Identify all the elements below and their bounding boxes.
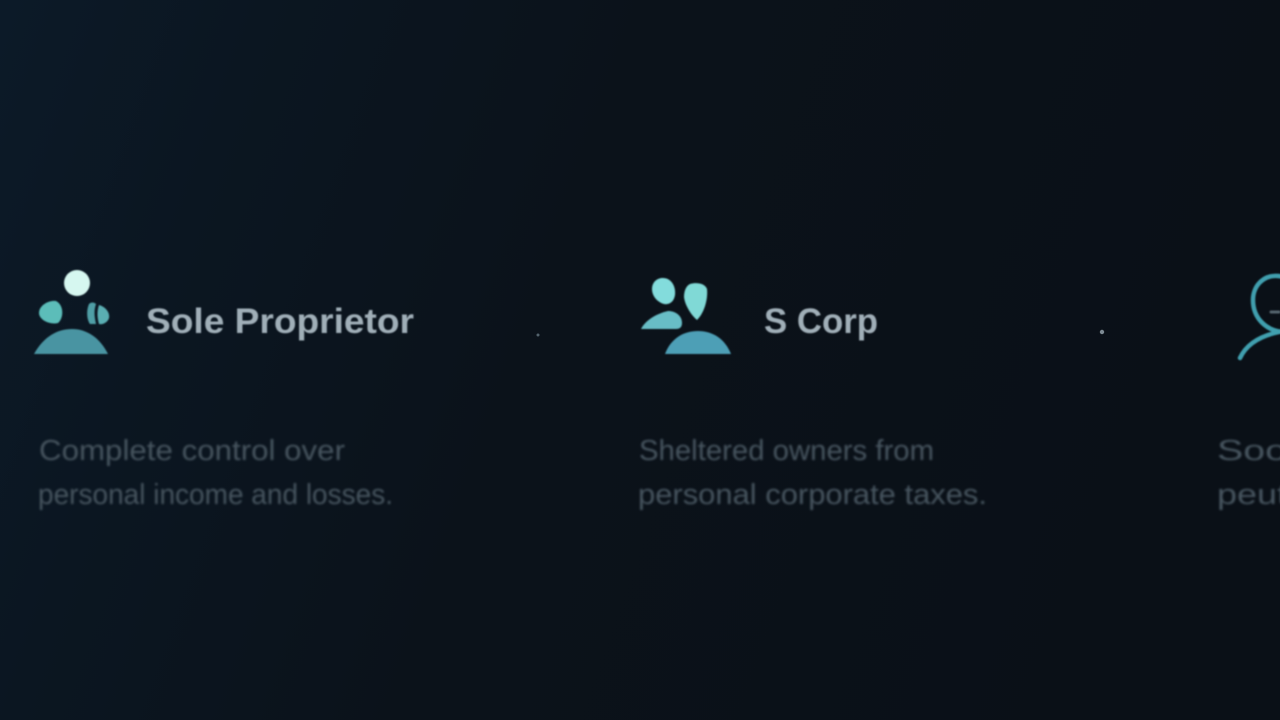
panel: sole proprietor [34, 270, 414, 511]
text block: sole proprietor description: personal income and losses. [38, 479, 393, 511]
text block: s corp description: personal corporate taxes. [638, 479, 987, 511]
text block: sole proprietor description [38, 435, 393, 511]
panel: third structure, cropped at right edge [1217, 276, 1280, 511]
heading: sole proprietor: Sole Proprietor [146, 302, 414, 341]
heading: s corp: S Corp [764, 302, 878, 341]
text block: s corp description: Sheltered owners from [639, 435, 934, 467]
text block: third structure description: peut [1217, 479, 1280, 511]
text block: third structure description [1217, 435, 1280, 511]
icon: outlined person [1240, 276, 1280, 358]
icon: sole proprietor group [34, 270, 109, 354]
panel: s corp [638, 278, 987, 511]
text block: sole proprietor description: Complete control over [39, 435, 345, 467]
separator dot [1100, 330, 1104, 334]
separator dot [536, 334, 540, 336]
icon: s corp group [641, 278, 731, 354]
text block: third structure description: Soo [1217, 435, 1280, 467]
text block: s corp description [638, 435, 987, 511]
